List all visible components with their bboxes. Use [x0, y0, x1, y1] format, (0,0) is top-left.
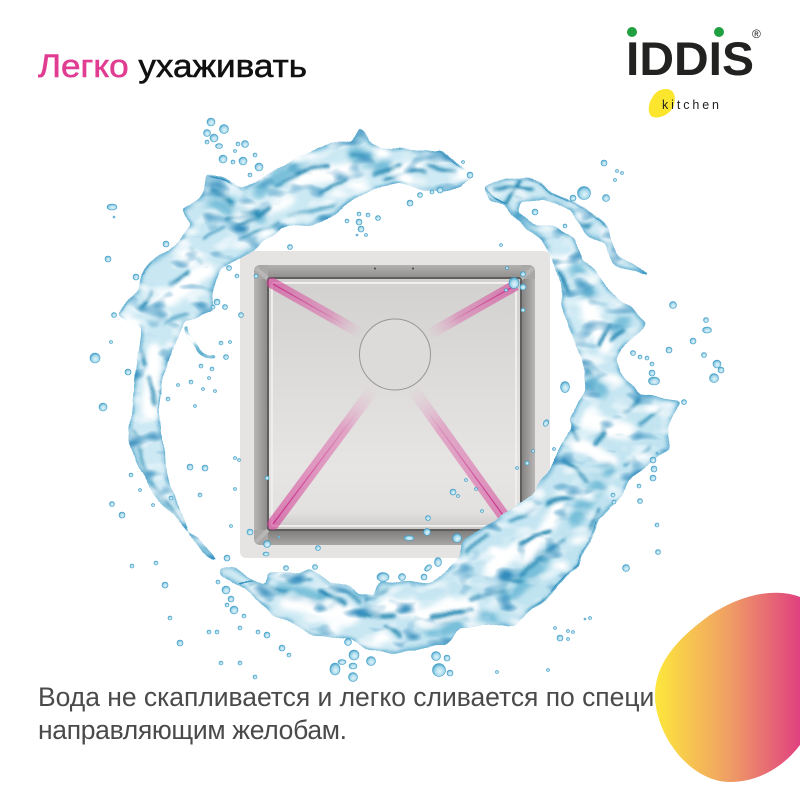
heading: Легко ухаживать: [38, 48, 307, 84]
logo registered mark: ®: [752, 27, 761, 41]
sink basin: [268, 278, 521, 530]
drain circle: [360, 319, 430, 390]
logo dots: [627, 27, 724, 37]
water: right stream and lower sweep: [220, 177, 680, 650]
water: upper left stream: [120, 130, 470, 560]
decorative gradient blob: [655, 593, 800, 782]
sink recess wall: [254, 265, 535, 545]
description text: направляющим желобам.: [38, 715, 347, 745]
water: small curl: [183, 330, 213, 357]
logo: IDDIS kitchen: [626, 27, 761, 117]
sink illustration: [240, 251, 550, 558]
logo kitchen label: kitchen: [662, 98, 719, 112]
groove: bottom right: [412, 388, 508, 522]
groove: bottom left: [273, 388, 374, 524]
small holes: [374, 268, 376, 270]
description text: [38, 682, 750, 745]
water droplets: [90, 118, 724, 682]
water splash ring: [120, 130, 680, 650]
logo wordmark: IDDIS: [626, 32, 754, 85]
groove: top left: [272, 283, 362, 334]
groove: top right: [428, 285, 516, 335]
description text: Вода не скапливается и легко сливается по специальным: [38, 682, 750, 712]
logo yellow spot: [649, 89, 675, 117]
sink outer rim: [240, 251, 550, 558]
